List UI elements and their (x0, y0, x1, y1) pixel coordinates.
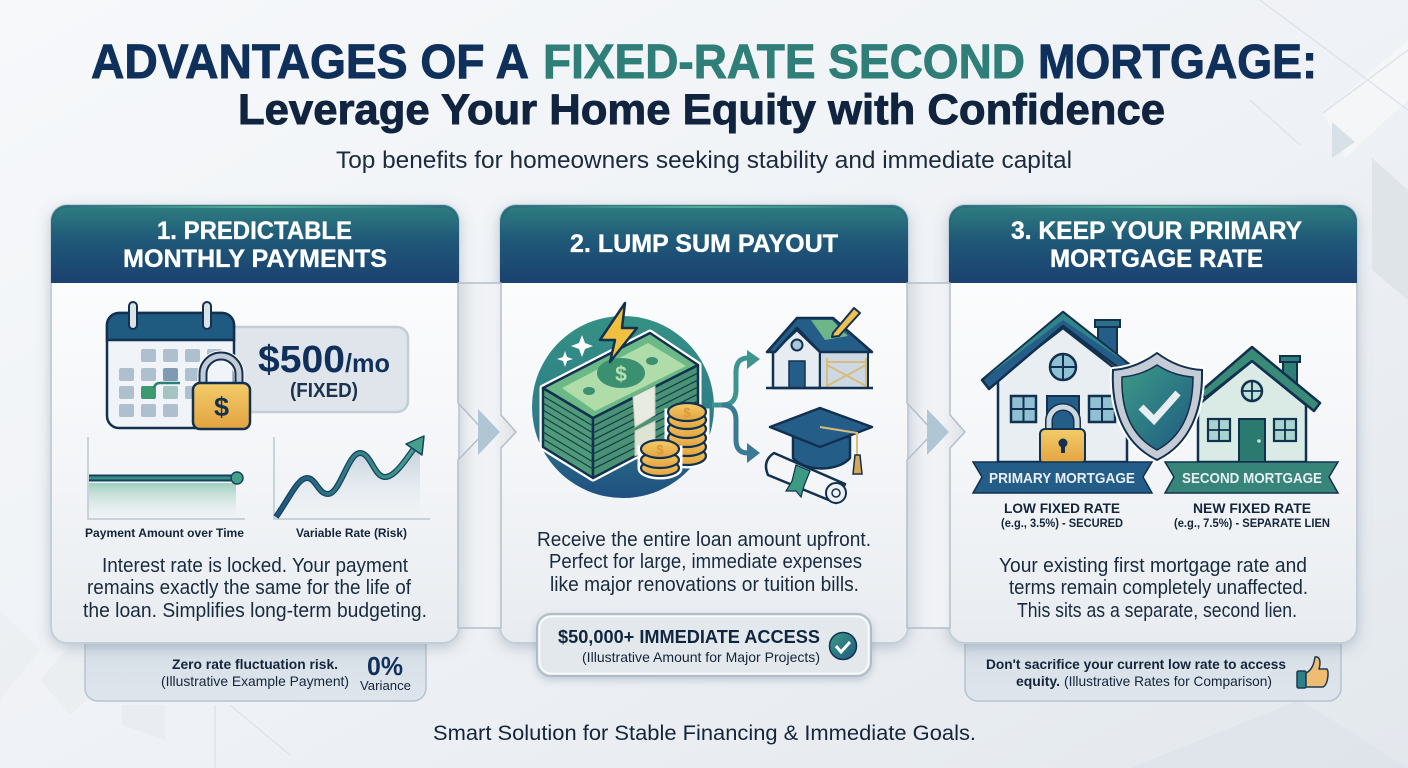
title (91, 36, 1317, 134)
rate label: second: (e.g., 7.5%) - SEPARATE LIEN (1174, 516, 1330, 530)
arrow: card 1 to card 2 (458, 283, 516, 628)
icon: check badge (830, 632, 856, 660)
callout: immediate access (537, 614, 871, 676)
heading: card 1: MONTHLY PAYMENTS (123, 245, 387, 273)
bottom tab: card 1 note: Variance (360, 678, 411, 693)
title: MORTGAGE: (1038, 36, 1317, 89)
rate label: second: NEW FIXED RATE (1193, 500, 1311, 516)
heading: card 3: MORTGAGE RATE (1050, 245, 1263, 273)
panel: keep your primary mortgage rate (949, 205, 1357, 643)
bottom tab: card 3 note (965, 625, 1341, 701)
title: ADVANTAGES OF A (91, 36, 529, 89)
ribbon: second mortgage: SECOND MORTGAGE (1182, 470, 1322, 487)
icon: second house (1198, 347, 1320, 462)
rate label: primary (1001, 500, 1123, 530)
price callout: (FIXED) (290, 380, 358, 402)
bottom tab: card 3 note: (Illustrative Rates for Comparison) (1064, 673, 1272, 689)
heading: card 3: 3. KEEP YOUR PRIMARY (1011, 217, 1302, 245)
heading: card 1: 1. PREDICTABLE (157, 217, 352, 245)
bottom tab: card 3 note: Don't sacrifice your current low rate to access (986, 656, 1286, 672)
body text: card 2: Receive the entire loan amount upfront. (537, 529, 871, 551)
arrow: card 2 to card 3 (907, 283, 965, 628)
icon: money stack with coins: $ (615, 363, 627, 386)
footer tagline: Smart Solution for Stable Financing & Immediate Goals. (433, 722, 976, 745)
subtitle: Top benefits for homeowners seeking stability and immediate capital (336, 147, 1072, 174)
rate label: primary: (e.g., 3.5%) - SECURED (1001, 516, 1123, 530)
price callout: $500 (258, 339, 345, 381)
bottom tab: card 3 note: equity. (1016, 673, 1060, 689)
body text: card 2: Perfect for large, immediate expenses (549, 551, 862, 573)
chart: variable rate risk: Variable Rate (Risk) (296, 526, 407, 540)
ribbon: second mortgage (1165, 462, 1338, 493)
body text: card 3: Your existing first mortgage rate and (999, 555, 1307, 577)
body text: card 3: This sits as a separate, second lien. (1017, 600, 1297, 622)
arrows: branch to uses (712, 350, 760, 463)
panel: predictable monthly payments (51, 205, 459, 643)
heading: card 2: 2. LUMP SUM PAYOUT (570, 230, 838, 258)
icon: thumbs up (1297, 657, 1328, 688)
bottom tab: card 1 note: Zero rate fluctuation risk. (172, 656, 338, 672)
chart: variable rate risk (274, 436, 430, 540)
price callout (225, 327, 408, 412)
icon: calendar with lock (107, 302, 250, 429)
heading: card 1 (51, 205, 459, 283)
body text: card 1: remains exactly the same for the life of (87, 577, 411, 599)
title: Leverage Your Home Equity with Confidence (238, 86, 1165, 134)
icon: primary house with lock (982, 312, 1130, 464)
bottom tab: card 1 note: (Illustrative Example Payment) (161, 673, 349, 689)
ribbon: primary mortgage (973, 462, 1152, 493)
rate label: second (1174, 500, 1330, 530)
icon: padlock: $ (214, 392, 229, 422)
title: FIXED-RATE SECOND (543, 36, 1025, 89)
panel: lump sum payout (500, 205, 908, 643)
callout: immediate access: (Illustrative Amount for Major Projects) (582, 649, 820, 665)
icon: house renovation (766, 308, 873, 388)
icon: money stack with coins: $ (656, 442, 664, 457)
bottom tab: card 1 note: 0% (367, 651, 403, 681)
ribbon: primary mortgage: PRIMARY MORTGAGE (989, 470, 1135, 487)
body text: card 2: like major renovations or tuition bills. (550, 574, 859, 596)
body text: card 1 (83, 555, 427, 622)
price callout: /mo (345, 348, 390, 378)
bottom tab: card 1 note (85, 625, 426, 701)
body text: card 3: terms remain completely unaffected. (1009, 577, 1308, 599)
body text: card 1: Interest rate is locked. Your payment (102, 555, 408, 577)
heading: card 2 (500, 205, 908, 283)
icon: padlock (193, 356, 250, 429)
icon: graduation cap and diploma (766, 408, 872, 503)
icon: shield with check (1113, 353, 1202, 460)
icon: money stack with coins (532, 316, 714, 498)
icon: money stack with coins: $ (683, 405, 691, 420)
callout: immediate access: $50,000+ IMMEDIATE ACCESS (558, 627, 820, 647)
body text: card 2 (537, 529, 871, 596)
body text: card 1: the loan. Simplifies long-term budgeting. (83, 600, 427, 622)
body text: card 3 (999, 555, 1308, 622)
heading: card 3 (949, 205, 1357, 283)
chart: payment amount over time (85, 437, 245, 540)
icon: lightning bolt (600, 303, 637, 362)
chart: payment amount over time: Payment Amount over Time (85, 526, 244, 540)
rate label: primary: LOW FIXED RATE (1004, 500, 1120, 516)
